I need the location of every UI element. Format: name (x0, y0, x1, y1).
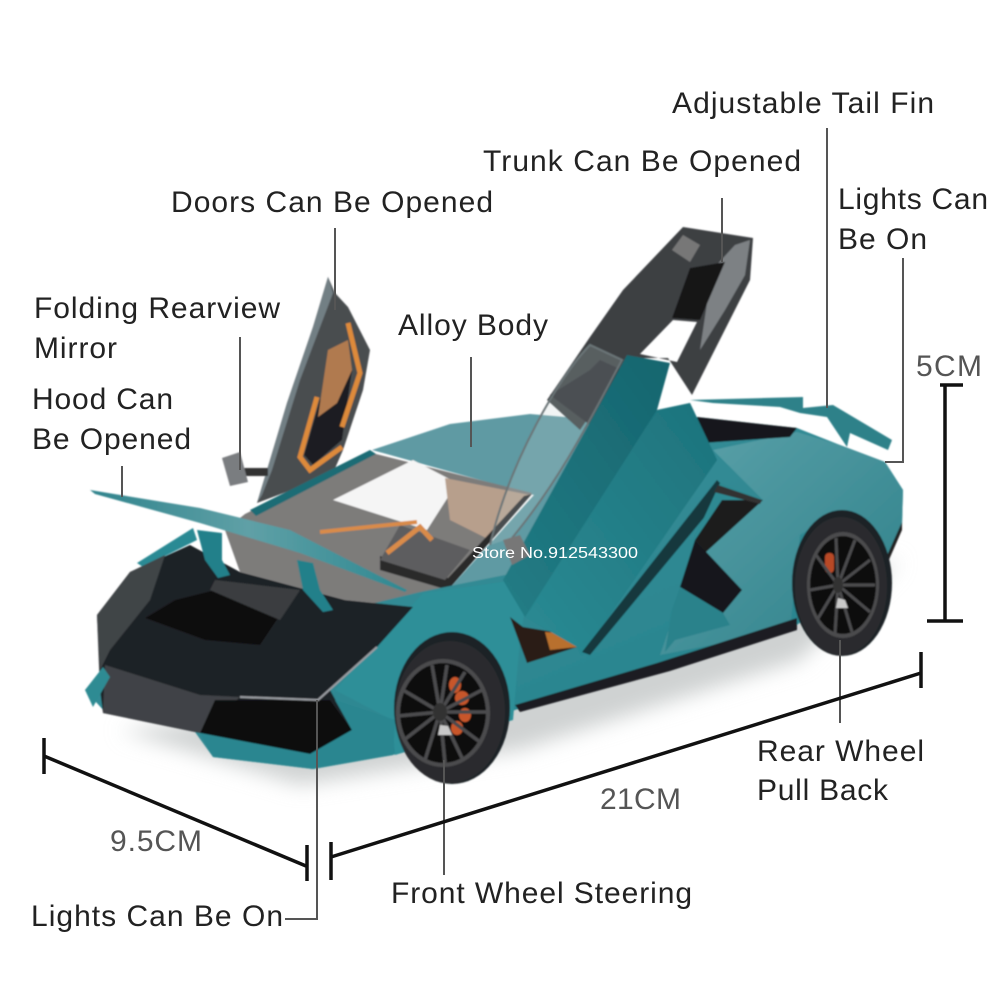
label: hood (32, 383, 191, 456)
dimension: length 21CM (331, 652, 921, 880)
label: hood: Hood Can (32, 383, 173, 416)
raised hood (90, 490, 407, 592)
label: alloy body: Alloy Body (398, 309, 548, 342)
door glass (490, 345, 622, 545)
rear wheel (795, 517, 887, 655)
leader lines (122, 128, 903, 919)
label: mirror: Mirror (34, 332, 117, 365)
label: 5CM: 5CM (916, 350, 982, 383)
brake caliper (449, 677, 471, 735)
label: doors: Doors Can Be Opened (171, 186, 493, 219)
front dark hood bay (85, 528, 413, 754)
label: front lights: Lights Can Be On (31, 900, 283, 933)
scissor door (503, 355, 727, 655)
dimension: height 5CM (927, 385, 963, 621)
label: 21CM: 21CM (600, 783, 681, 816)
engine bay (697, 417, 797, 443)
label: hood: Be Opened (32, 423, 191, 456)
front arch (394, 632, 510, 784)
seats orange trim (320, 522, 417, 532)
label: rear lights (838, 183, 988, 256)
label: front wheel steering: Front Wheel Steering (391, 877, 692, 910)
rear arch (792, 510, 892, 656)
car (85, 227, 903, 784)
label: rear lights: Lights Can (838, 183, 988, 216)
rear lower door sill panel (665, 587, 730, 652)
front wheel (395, 641, 505, 783)
watermark: Store No.912543300 (472, 545, 638, 562)
mirror (222, 452, 268, 486)
sill (515, 618, 797, 712)
label: trunk: Trunk Can Be Opened (483, 145, 801, 178)
label: adjustable tail fin: Adjustable Tail Fin (672, 87, 934, 120)
roof (372, 414, 600, 590)
teal front lip (200, 700, 395, 769)
label: mirror (34, 292, 280, 365)
carbon trunk lid (547, 227, 753, 430)
windshield (225, 450, 532, 607)
label: rear wheel (757, 735, 924, 807)
ground shadow (120, 560, 900, 785)
wheel well gap (510, 617, 577, 663)
main body (85, 417, 903, 769)
label: 9.5CM: 9.5CM (110, 825, 202, 858)
orange honeycomb (318, 340, 352, 417)
label: rear wheel: Rear Wheel (757, 735, 924, 768)
label: rear lights: Be On (838, 223, 927, 256)
door mirror (503, 535, 530, 565)
label: rear wheel: Pull Back (757, 774, 889, 807)
dimension: width 9.5CM (44, 738, 307, 881)
side intake (680, 483, 763, 613)
hood props (197, 530, 230, 578)
left door (257, 277, 370, 503)
label: mirror: Folding Rearview (34, 292, 280, 325)
spoiler (690, 397, 892, 450)
